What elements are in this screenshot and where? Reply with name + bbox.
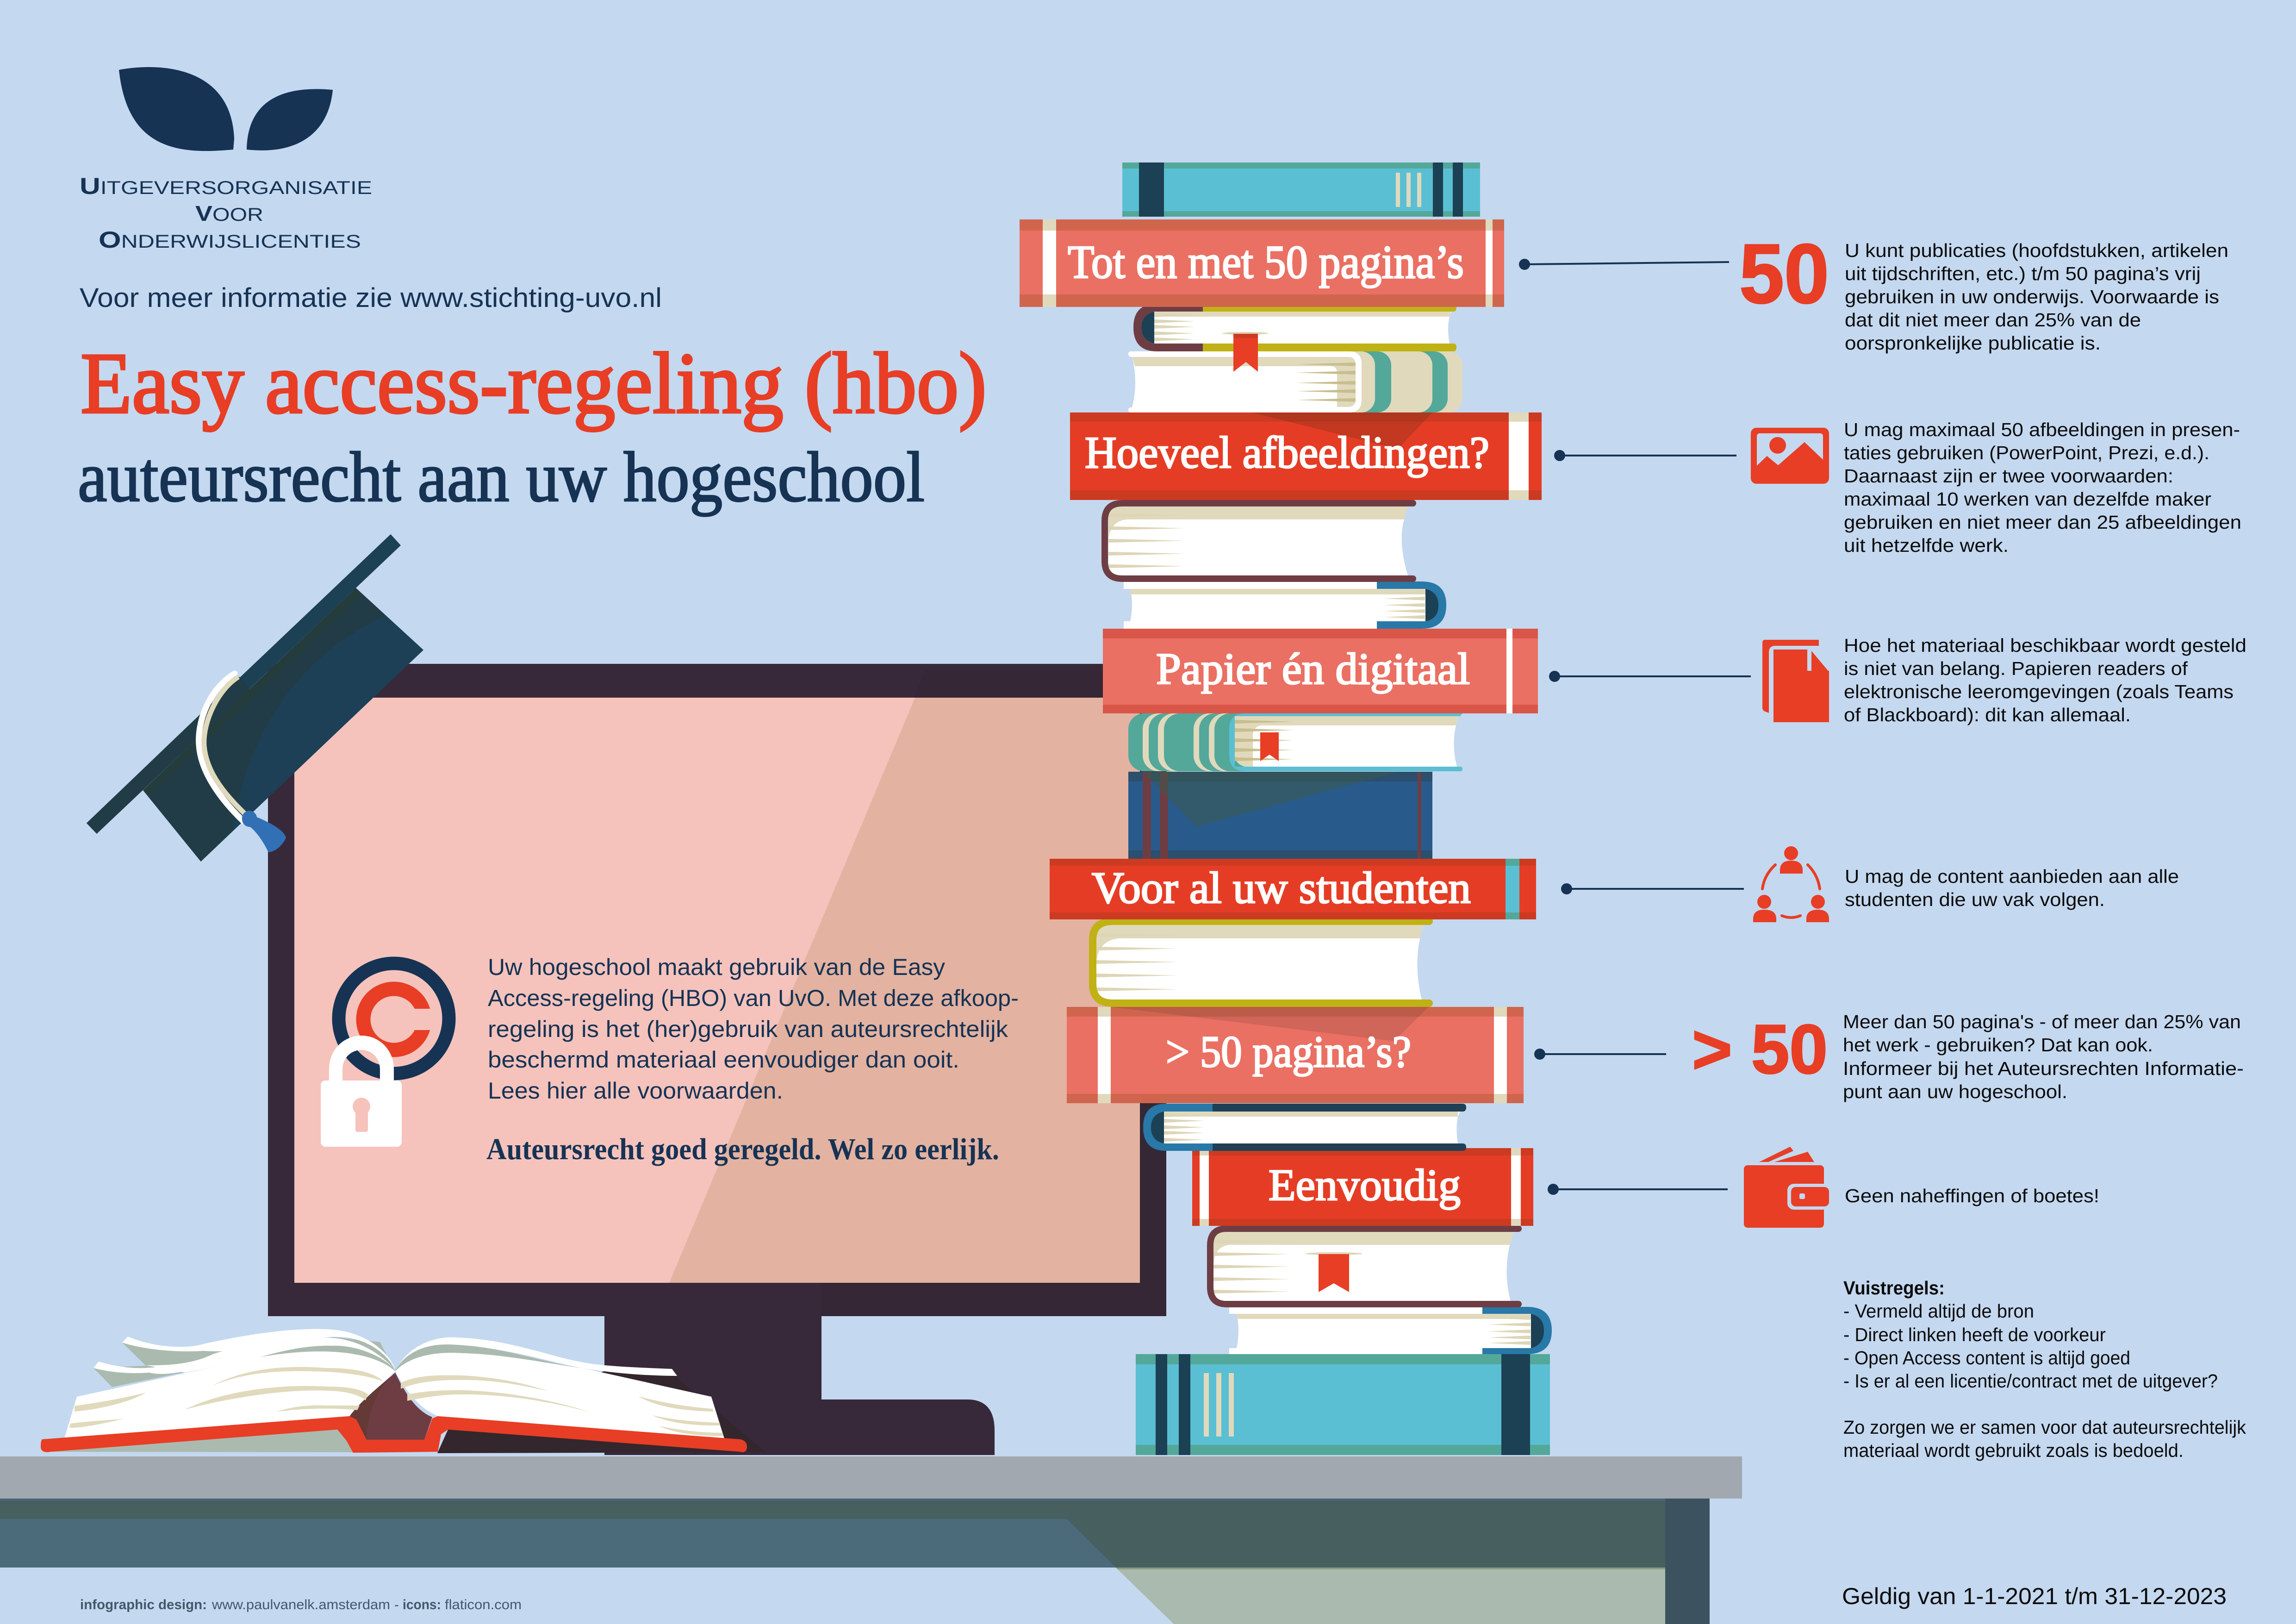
text: afbeeldingen bbox=[1844, 419, 2241, 556]
book: blue spine right, lower bbox=[1229, 1307, 1552, 1354]
book: Tot en met 50 pagina's: Tot en met 50 pagina’s bbox=[1068, 236, 1464, 288]
book: top teal bbox=[1122, 162, 1480, 217]
computer monitor bbox=[268, 664, 1166, 1455]
book: yellow and brown spine bbox=[1133, 304, 1456, 372]
connector 4 bbox=[1561, 883, 1744, 894]
text: vuistregels: - Direct linken heeft de voorkeur bbox=[1843, 1324, 2106, 1345]
monitor text: regeling is het (her)gebruik van auteursrechtelijk bbox=[488, 1016, 1008, 1042]
book: yellow spine bbox=[1093, 921, 1429, 1003]
connector 6 bbox=[1548, 1184, 1728, 1195]
book: Eenvoudig: Eenvoudig bbox=[1269, 1160, 1461, 1210]
book: bottom teal bbox=[1136, 1354, 1550, 1455]
text: 50 pagina's bbox=[1845, 240, 2228, 354]
book: brown spine, bookmark bbox=[1210, 1229, 1518, 1304]
text: afbeeldingen: gebruiken en niet meer dan 25 afbeeldingen bbox=[1844, 512, 2241, 533]
text: vuistregels: Vuistregels: bbox=[1843, 1277, 1945, 1299]
slogan: Auteursrecht goed geregeld. Wel zo eerlijk. bbox=[486, 1132, 999, 1166]
book: teal fanned pages with cyan cover bbox=[1128, 713, 1462, 771]
text: studenten: U mag de content aanbieden aan alle bbox=[1845, 866, 2179, 887]
connector 5 bbox=[1534, 1049, 1666, 1060]
book: &gt; 50 pagina's: > 50 pagina’s? bbox=[1166, 1027, 1411, 1076]
text: papier en digitaal: is niet van belang. Papieren readers of bbox=[1844, 658, 2188, 679]
text: meer dan 50: het werk - gebruiken? Dat kan ook. bbox=[1843, 1034, 2153, 1056]
number: 50: 50 bbox=[1739, 226, 1829, 321]
footer credits: icons: bbox=[403, 1597, 441, 1612]
footer credits bbox=[80, 1597, 522, 1612]
title: Easy access-regeling (hbo) bbox=[81, 335, 987, 431]
book stack bbox=[1020, 162, 1552, 1455]
book: Papier en digitaal bbox=[1103, 629, 1538, 713]
monitor text: beschermd materiaal eenvoudiger dan ooit. bbox=[488, 1047, 959, 1073]
book: Voor al uw studenten bbox=[1050, 859, 1536, 919]
footer credits: infographic design: bbox=[80, 1597, 207, 1612]
icon: students bbox=[1753, 846, 1829, 922]
footer credits: - bbox=[394, 1597, 399, 1612]
text: 50 pagina's: oorspronkelijke publicatie is. bbox=[1845, 332, 2101, 354]
connector 3 bbox=[1549, 671, 1751, 682]
graduation cap bbox=[87, 534, 423, 862]
book: Eenvoudig bbox=[1192, 1148, 1533, 1226]
icon: copyright with padlock bbox=[321, 963, 449, 1147]
footer credits: flaticon.com bbox=[445, 1597, 522, 1612]
text: afbeeldingen: uit hetzelfde werk. bbox=[1844, 535, 2009, 556]
validity date: Geldig van 1-1-2021 t/m 31-12-2023 bbox=[1842, 1583, 2227, 1609]
icon: documents bbox=[1762, 640, 1829, 722]
text: afbeeldingen: U mag maximaal 50 afbeeldingen in presen- bbox=[1844, 419, 2240, 440]
text: papier en digitaal: elektronische leeromgevingen (zoals Teams bbox=[1844, 681, 2234, 702]
text: studenten: studenten die uw vak volgen. bbox=[1845, 889, 2105, 910]
text: meer dan 50: Informeer bij het Auteursrechten Informatie- bbox=[1843, 1058, 2244, 1079]
book: large brown spine bbox=[1105, 503, 1413, 579]
text: boetes: Geen naheffingen of boetes! bbox=[1845, 1185, 2099, 1206]
text: vuistregels: Zo zorgen we er samen voor dat auteursrechtelijk bbox=[1843, 1417, 2246, 1438]
text: afbeeldingen: taties gebruiken (PowerPoint, Prezi, e.d.). bbox=[1844, 442, 2209, 463]
book: Tot en met 50 pagina's bbox=[1020, 219, 1504, 307]
text: afbeeldingen: Daarnaast zijn er twee voorwaarden: bbox=[1844, 465, 2173, 487]
text: 50 pagina's: gebruiken in uw onderwijs. Voorwaarde is bbox=[1845, 286, 2219, 307]
text: meer dan 50: Meer dan 50 pagina's - of meer dan 25% van bbox=[1843, 1011, 2241, 1032]
text: papier en digitaal: Hoe het materiaal beschikbaar wordt gesteld bbox=[1844, 635, 2246, 656]
book: Hoeveel afbeeldingen: Hoeveel afbeeldingen? bbox=[1085, 428, 1489, 478]
logo: UvO: UITGEVERSORGANISATIE bbox=[80, 173, 372, 199]
text: 50 pagina's: uit tijdschriften, etc.) t/m 50 pagina’s vrij bbox=[1845, 263, 2201, 284]
monitor text: Lees hier alle voorwaarden. bbox=[488, 1078, 783, 1104]
book: &gt; 50 pagina's bbox=[1067, 1007, 1524, 1103]
text: vuistregels: - Vermeld altijd de bron bbox=[1843, 1300, 2034, 1322]
book: Voor al uw studenten: Voor al uw studenten bbox=[1092, 863, 1471, 912]
text: vuistregels: materiaal wordt gebruikt zoals is bedoeld. bbox=[1843, 1440, 2184, 1461]
book: blue and dark spine bbox=[1143, 1104, 1466, 1151]
book: cream and teal stack bbox=[1128, 351, 1462, 412]
monitor text: Access-regeling (HBO) van UvO. Met deze afkoop- bbox=[488, 985, 1019, 1011]
book: Papier en digitaal: Papier én digitaal bbox=[1156, 644, 1470, 693]
icon: wallet bbox=[1744, 1147, 1829, 1228]
text: meer dan 50: punt aan uw hogeschool. bbox=[1843, 1081, 2067, 1102]
subtitle: auteursrecht aan uw hogeschool bbox=[78, 438, 925, 517]
logo: UvO: VOOR bbox=[195, 201, 263, 225]
number: greater than 50: > 50 bbox=[1692, 1010, 1828, 1088]
logo: UvO: ONDERWIJSLICENTIES bbox=[99, 227, 361, 253]
text: studenten bbox=[1845, 866, 2179, 910]
text: 50 pagina's: U kunt publicaties (hoofdstukken, artikelen bbox=[1845, 240, 2228, 261]
text: papier en digitaal: of Blackboard): dit kan allemaal. bbox=[1844, 704, 2131, 725]
text: meer dan 50 bbox=[1843, 1011, 2244, 1102]
book: Hoeveel afbeeldingen bbox=[1070, 412, 1542, 500]
icon: image bbox=[1751, 428, 1829, 484]
open book bbox=[41, 1329, 766, 1453]
monitor text: Uw hogeschool maakt gebruik van de Easy bbox=[488, 954, 945, 980]
text: afbeeldingen: maximaal 10 werken van dezelfde maker bbox=[1844, 488, 2211, 510]
logo: UvO bbox=[80, 67, 372, 253]
book: blue spine right, upper bbox=[1124, 581, 1446, 629]
text: 50 pagina's: dat dit niet meer dan 25% van de bbox=[1845, 309, 2141, 331]
footer credits: www.paulvanelk.amsterdam bbox=[212, 1597, 390, 1612]
text: papier en digitaal bbox=[1844, 635, 2246, 725]
connector 2 bbox=[1554, 450, 1736, 461]
connector 1 bbox=[1519, 259, 1729, 270]
book: blue with brown bands bbox=[1128, 772, 1432, 859]
table bbox=[0, 1456, 1742, 1624]
text: vuistregels bbox=[1843, 1277, 2246, 1461]
monitor text bbox=[488, 954, 1019, 1104]
website line: Voor meer informatie zie www.stichting-uvo.nl bbox=[80, 283, 662, 313]
text: vuistregels: - Is er al een licentie/contract met de uitgever? bbox=[1843, 1370, 2218, 1392]
text: vuistregels: - Open Access content is altijd goed bbox=[1843, 1347, 2130, 1368]
